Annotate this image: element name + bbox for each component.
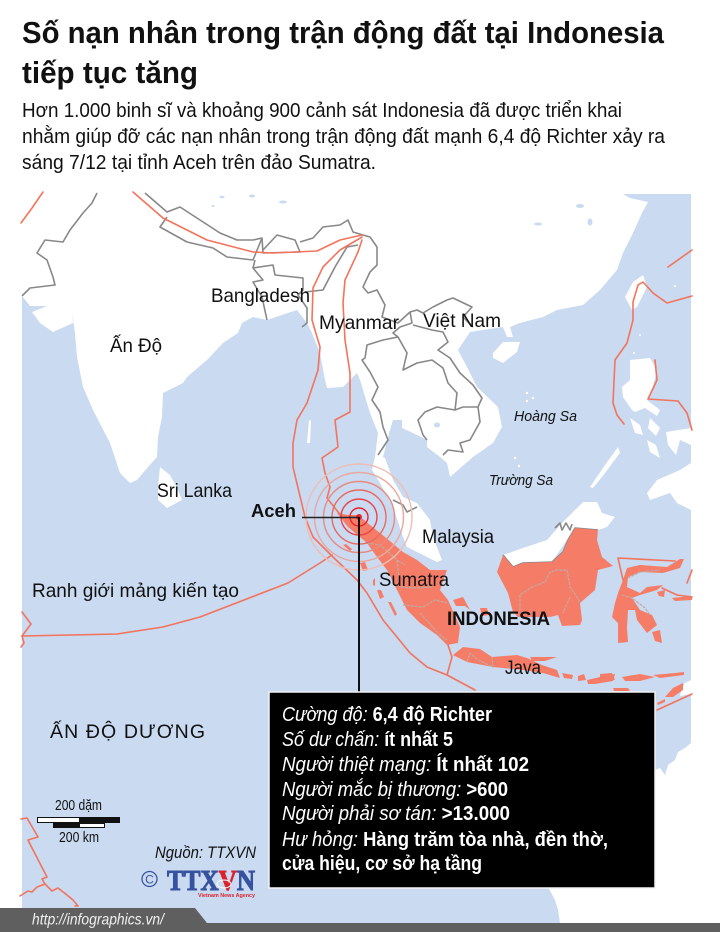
intro text: nhằm giúp đỡ các nạn nhân trong trận động đất mạnh 6,4 độ Richter xảy ra (22, 125, 666, 148)
callout: earthquake facts: Cường độ: 6,4 độ Richter (282, 704, 492, 726)
footer bar (0, 908, 720, 932)
province lines (397, 560, 432, 588)
callout: earthquake facts: Người thiệt mạng: Ít nhất 102 (282, 753, 529, 776)
intro text: Hơn 1.000 binh sĩ và khoảng 900 cảnh sát Indonesia đã được triển khai (22, 99, 622, 122)
map labels: Trường Sa (489, 472, 553, 489)
land: Asian mainland (22, 194, 648, 562)
callout: earthquake facts: Người phải sơ tán: >13.000 (282, 803, 510, 825)
map labels: Bangladesh (211, 285, 310, 307)
callout: earthquake facts (269, 692, 655, 888)
map labels: Việt Nam (423, 310, 501, 332)
lakes (212, 194, 592, 428)
Sumatra islands (343, 544, 489, 616)
logo: TTXVN: C (145, 872, 154, 886)
title: Số nạn nhân trong trận động đất tại Indonesia (22, 15, 665, 50)
callout: earthquake facts: Người mắc bị thương: >600 (282, 778, 508, 801)
white margin right of the map (691, 194, 720, 923)
map labels: Sumatra (379, 569, 449, 591)
Java and Lesser Sunda islands (453, 647, 684, 705)
map labels (32, 285, 577, 743)
map labels: Aceh (251, 500, 296, 521)
scale bar (38, 798, 120, 846)
intro text (22, 99, 666, 174)
source: Nguồn: TTXVN (155, 843, 257, 862)
map labels: Sri Lanka (157, 480, 232, 502)
leader lines from Aceh to box (302, 517, 359, 692)
map labels: Hoàng Sa (514, 408, 577, 425)
map labels: INDONESIA (447, 608, 550, 630)
map labels: Ấn Độ (110, 334, 162, 357)
title (22, 15, 665, 90)
callout: earthquake facts: Hư hỏng: Hàng trăm tòa nhà, đền thờ, (282, 829, 608, 851)
land: islands (158, 275, 691, 923)
callout: earthquake facts: Số dư chấn: ít nhất 5 (282, 729, 453, 751)
footer bar: http://infographics.vn/ (32, 912, 165, 928)
logo: TTXVN: Vietnam News Agency (198, 893, 256, 899)
scale bar: 200 km (59, 830, 99, 846)
scale bar: 200 dặm (55, 798, 102, 814)
epicenter rings (306, 464, 412, 570)
map labels: Java (505, 657, 541, 679)
Indonesia highlighted (337, 513, 692, 705)
country borders (22, 193, 683, 696)
title: tiếp tục tăng (22, 55, 198, 90)
callout: earthquake facts: cửa hiệu, cơ sở hạ tầng (282, 853, 482, 875)
map labels: Malaysia (422, 526, 494, 548)
sea (22, 194, 691, 923)
Kalimantan (497, 528, 613, 626)
Sulawesi (612, 559, 692, 643)
intro text: sáng 7/12 tại tỉnh Aceh trên đảo Sumatra. (22, 151, 376, 174)
map labels: Myanmar (319, 312, 399, 334)
panel: map (20, 192, 720, 923)
logo: TTXVN: TTXVN (167, 865, 255, 897)
Sumatra (337, 513, 460, 645)
map labels: Ranh giới mảng kiến tạo (32, 580, 239, 602)
map labels: ẤN ĐỘ DƯƠNG (50, 720, 205, 743)
tectonic plate boundaries (20, 192, 692, 906)
